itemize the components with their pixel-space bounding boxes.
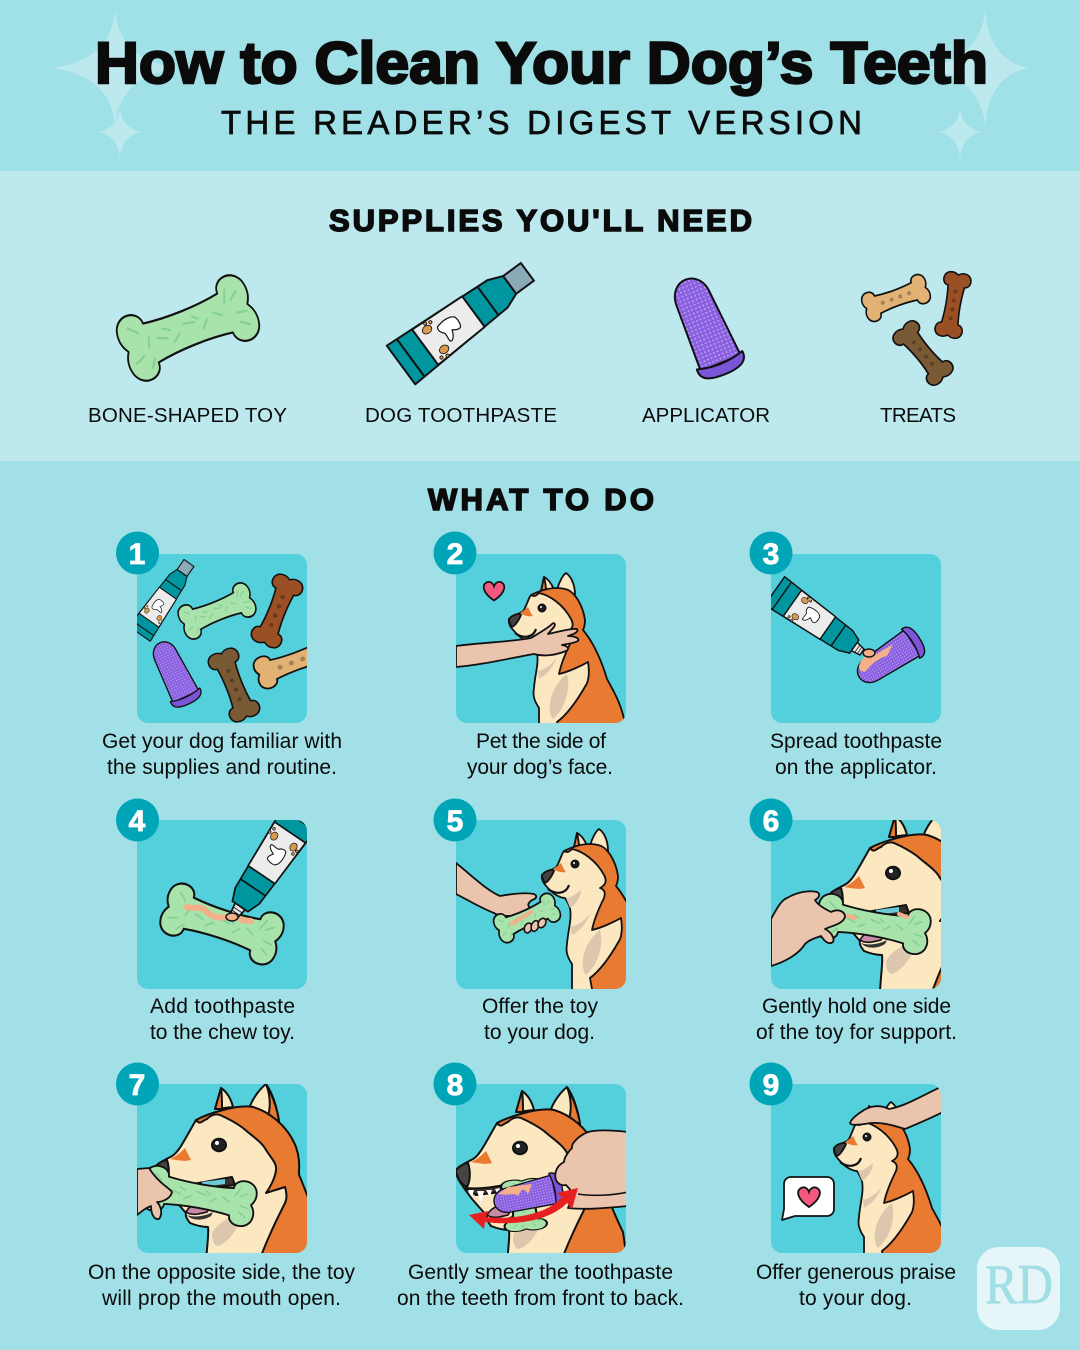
step 4 bbox=[116, 798, 321, 1044]
caption 7: On the opposite side, the toy bbox=[88, 1261, 356, 1284]
step 2 bbox=[434, 532, 629, 779]
illustration: toy props mouth open bbox=[137, 1084, 307, 1253]
number badge 7 bbox=[116, 1062, 159, 1106]
caption 6: of the toy for support. bbox=[756, 1021, 957, 1044]
caption 4: Add toothpaste bbox=[150, 995, 295, 1018]
number badge 6 bbox=[750, 798, 792, 842]
logo: RD bbox=[977, 1247, 1060, 1330]
number badge 2: 2 bbox=[447, 538, 463, 571]
number badge 9: 9 bbox=[763, 1069, 779, 1102]
caption 2: your dog’s face. bbox=[467, 756, 613, 779]
caption 8: Gently smear the toothpaste bbox=[408, 1261, 673, 1284]
caption 7: will prop the mouth open. bbox=[101, 1287, 341, 1310]
caption 2: Pet the side of bbox=[476, 730, 606, 753]
number badge 4 bbox=[116, 798, 159, 842]
step 5 bbox=[434, 798, 626, 1044]
illustration: smear toothpaste front to back bbox=[456, 1084, 628, 1267]
caption 1: Get your dog familiar with bbox=[102, 730, 342, 753]
number badge 6: 6 bbox=[763, 805, 779, 838]
step 6 bbox=[750, 798, 956, 1044]
sparkles bbox=[52, 10, 1028, 158]
number badge 9 bbox=[750, 1062, 792, 1106]
number badge 5 bbox=[434, 798, 476, 842]
icon: treats bbox=[859, 270, 972, 388]
supply label: treats: TREATS bbox=[880, 404, 956, 427]
logo: RD: RD bbox=[985, 1254, 1053, 1316]
icon: bone-shaped toy bbox=[111, 270, 265, 386]
illustration: offering toy to dog bbox=[456, 820, 626, 989]
step 8 bbox=[397, 1062, 684, 1310]
step 9 bbox=[750, 1062, 956, 1310]
icon: dog toothpaste bbox=[387, 253, 542, 384]
illustration: hold one side of toy bbox=[771, 820, 941, 989]
panel: supplies bbox=[0, 171, 1080, 461]
step 7 bbox=[88, 1062, 356, 1310]
what to do heading: WHAT TO DO bbox=[428, 482, 654, 517]
caption 5: to your dog. bbox=[484, 1021, 595, 1044]
supplies heading: SUPPLIES YOU'LL NEED bbox=[329, 203, 752, 238]
illustration: petting dog's face bbox=[456, 554, 626, 723]
caption 6: Gently hold one side bbox=[762, 995, 951, 1018]
caption 5: Offer the toy bbox=[482, 995, 598, 1018]
caption 9: Offer generous praise bbox=[756, 1261, 956, 1284]
number badge 1: 1 bbox=[129, 538, 145, 571]
supply label: applicator: APPLICATOR bbox=[642, 404, 770, 427]
step 3 bbox=[750, 532, 942, 779]
subtitle: THE READER’S DIGEST VERSION bbox=[221, 104, 862, 141]
illustration: toothpaste onto chew toy bbox=[137, 820, 307, 989]
number badge 2 bbox=[434, 532, 476, 574]
title: How to Clean Your Dog’s Teeth bbox=[95, 31, 988, 96]
number badge 4: 4 bbox=[129, 805, 146, 838]
number badge 1 bbox=[116, 532, 159, 574]
illustration: praise with pat and heart bubble bbox=[771, 1084, 941, 1253]
number badge 8 bbox=[434, 1062, 476, 1106]
step 1 bbox=[102, 532, 343, 779]
header background bbox=[0, 0, 1080, 171]
supply label: toothpaste: DOG TOOTHPASTE bbox=[365, 404, 557, 427]
caption 1: the supplies and routine. bbox=[107, 756, 337, 779]
illustration: supplies laid out bbox=[137, 554, 307, 723]
number badge 5: 5 bbox=[447, 805, 463, 838]
caption 3: Spread toothpaste bbox=[770, 730, 942, 753]
caption 9: to your dog. bbox=[799, 1287, 912, 1310]
number badge 8: 8 bbox=[447, 1069, 463, 1102]
caption 4: to the chew toy. bbox=[150, 1021, 295, 1044]
supply label: toy: BONE-SHAPED TOY bbox=[88, 404, 287, 427]
number badge 3 bbox=[750, 532, 792, 574]
number badge 3: 3 bbox=[763, 538, 779, 571]
number badge 7: 7 bbox=[129, 1069, 145, 1102]
icon: applicator bbox=[664, 270, 748, 383]
caption 8: on the teeth from front to back. bbox=[397, 1287, 684, 1310]
caption 3: on the applicator. bbox=[775, 756, 937, 779]
illustration: toothpaste onto applicator bbox=[765, 554, 941, 723]
